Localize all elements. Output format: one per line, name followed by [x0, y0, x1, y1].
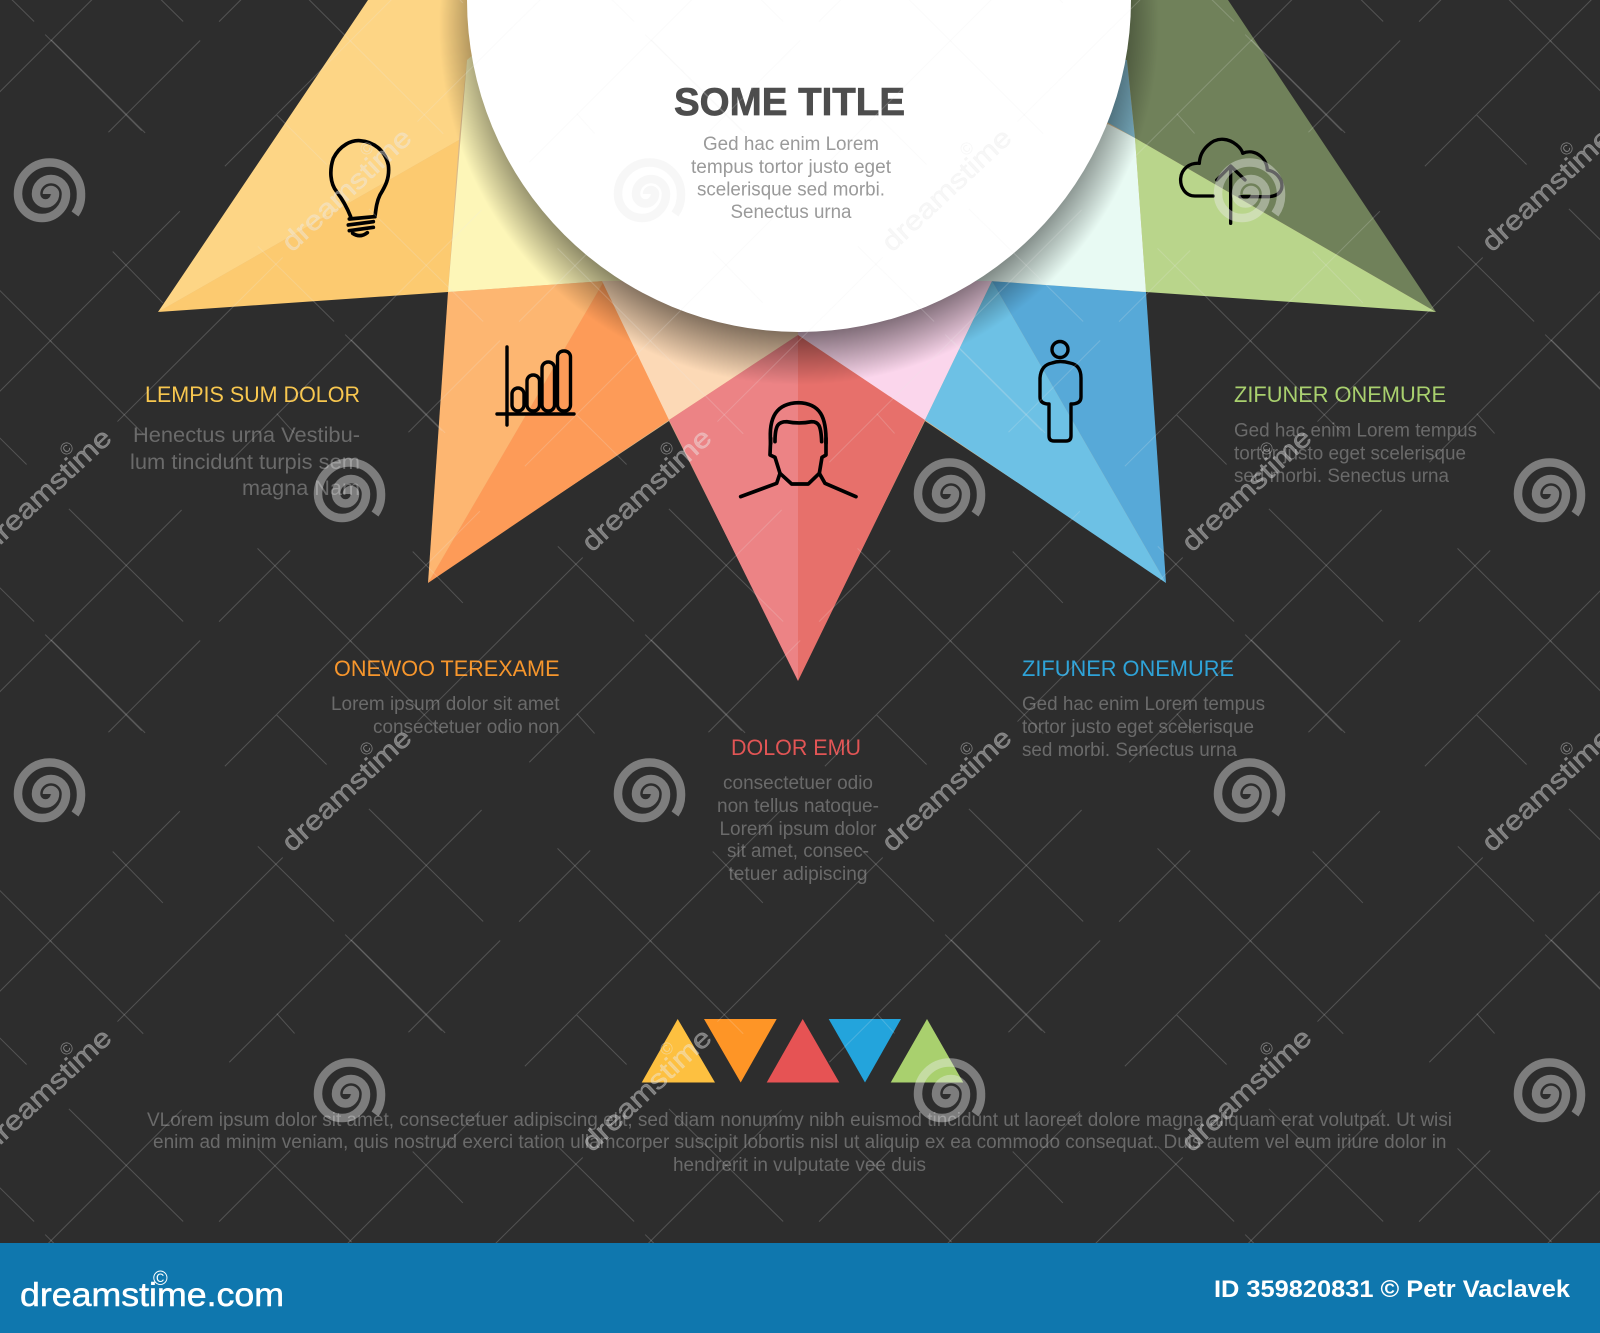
- triangle: orange: [428, 281, 669, 583]
- text block: orange: Lorem ipsum dolor sit amet: [331, 694, 560, 715]
- text block: blue: ZIFUNER ONEMURE: [1022, 656, 1234, 681]
- overlap: pink: [798, 280, 992, 420]
- text block: red: consectetuer odio: [723, 773, 873, 794]
- small triangle: orange: [704, 1019, 777, 1082]
- text block: orange: consectetuer odio non: [373, 717, 560, 738]
- text block: yellow: [130, 382, 360, 500]
- text block: green: Ged hac enim Lorem tempus: [1234, 420, 1477, 442]
- watermark overlay: ©: [1256, 437, 1278, 460]
- text block: blue: [1022, 656, 1265, 761]
- small triangle: blue: [829, 1019, 901, 1082]
- bottom paragraph: [147, 1110, 1452, 1176]
- text block: green: ZIFUNER ONEMURE: [1234, 382, 1446, 407]
- text block: red: non tellus natoque-: [717, 796, 879, 817]
- bottom paragraph: enim ad minim veniam, quis nostrud exerci tation ullamcorper suscipit lobortis nisl ut aliquip ex ea commodo consequat. Duis autem vel eum iriure dolor in: [153, 1132, 1446, 1153]
- title description: Ged hac enim Lorem: [703, 134, 879, 155]
- bottom paragraph: VLorem ipsum dolor sit amet, consectetuer adipiscing elit, sed diam nonummy nibh euismod tincidunt ut laoreet dolore magna aliquam erat volutpat. Ut wisi: [147, 1110, 1452, 1131]
- watermark overlay: dreamstime: [576, 422, 717, 557]
- icon: man face: [741, 403, 856, 497]
- text block: yellow: LEMPIS SUM DOLOR: [145, 382, 360, 407]
- small triangle: green: [891, 1019, 963, 1082]
- star of five folded triangles: [158, 0, 1436, 681]
- icon: light bulb: [331, 141, 389, 236]
- title description: Senectus urna: [730, 202, 852, 223]
- triangle: red: [669, 335, 925, 681]
- watermark overlay: dreamstime: [1176, 1022, 1317, 1157]
- watermark overlay: ©: [656, 1037, 678, 1060]
- small triangle: red: [767, 1019, 839, 1082]
- text block: orange: [331, 656, 560, 738]
- text block: blue: Ged hac enim Lorem tempus: [1022, 694, 1265, 715]
- footer credit: ID 359820831 © Petr Vaclavek: [1214, 1276, 1570, 1303]
- text block: red: DOLOR EMU: [731, 735, 861, 760]
- text block: yellow: magna Nam: [242, 477, 360, 500]
- footer band: [0, 1243, 1600, 1333]
- text block: green: tortor justo eget scelerisque: [1234, 444, 1466, 464]
- text block: red: Lorem ipsum dolor: [720, 819, 877, 840]
- watermark overlay: dreamstime: [576, 1022, 717, 1157]
- footer logo: ©: [153, 1268, 168, 1290]
- watermark overlay: dreamstime: [876, 122, 1017, 257]
- small triangle: yellow: [642, 1019, 715, 1082]
- text block: red: tetuer adipiscing: [728, 864, 868, 885]
- title: SOME TITLE: [674, 81, 905, 124]
- bottom paragraph: hendrerit in vulputate vee duis: [673, 1155, 926, 1176]
- text block: blue: tortor justo eget scelerisque: [1022, 717, 1254, 738]
- text block: orange: ONEWOO TEREXAME: [334, 656, 560, 681]
- text block: yellow: lum tincidunt turpis sem: [130, 451, 360, 474]
- watermark overlay: dreamstime: [276, 122, 417, 257]
- overlap: peach: [602, 280, 798, 420]
- watermark overlay: ©: [956, 137, 978, 160]
- icon: cloud upload: [1181, 139, 1282, 223]
- white title circle: [467, 0, 1131, 332]
- watermark overlay: ©: [1256, 1037, 1278, 1060]
- text block: green: sed morbi. Senectus urna: [1234, 466, 1449, 487]
- small triangles row: [642, 1019, 963, 1082]
- title description: scelerisque sed morbi.: [697, 180, 885, 200]
- icon: person: [1040, 342, 1081, 441]
- text block: blue: sed morbi. Senectus urna: [1022, 740, 1237, 761]
- watermark overlay: ©: [656, 437, 678, 460]
- title description: tempus tortor justo eget: [691, 157, 892, 178]
- circle shadow: [439, 0, 1159, 385]
- text block: red: [717, 735, 879, 885]
- overlap: mint: [950, 124, 1146, 292]
- watermark overlay: ©: [1556, 137, 1578, 160]
- watermark overlay: dreamstime: [1176, 422, 1317, 557]
- icon: bar chart: [497, 347, 574, 425]
- text block: green: [1234, 382, 1477, 487]
- star underlay: [160, 0, 1434, 679]
- watermark overlay: ©: [356, 137, 378, 160]
- watermark overlay: dreamstime: [1476, 122, 1600, 257]
- title description: [691, 134, 892, 223]
- watermark overlay: dreamstime: [876, 722, 1017, 857]
- text block: yellow: Henectus urna Vestibu-: [133, 424, 360, 447]
- watermark overlay: dreamstime: [1476, 722, 1600, 857]
- triangle: green: [1090, 0, 1436, 312]
- footer logo: dreamstime.com: [20, 1276, 284, 1313]
- watermark overlay: dreamstime: [276, 722, 417, 857]
- watermark overlay: ©: [956, 737, 978, 760]
- overlap: blue tint: [1080, 60, 1135, 138]
- text block: red: sit amet, consec-: [727, 841, 869, 862]
- watermark overlay: ©: [1556, 737, 1578, 760]
- triangle: yellow: [158, 0, 490, 312]
- triangle: blue: [925, 281, 1166, 583]
- watermark overlay: ©: [56, 437, 78, 460]
- overlap: pale yellow: [448, 40, 660, 292]
- watermark overlay: ©: [356, 737, 378, 760]
- watermark overlay: ©: [56, 1037, 78, 1060]
